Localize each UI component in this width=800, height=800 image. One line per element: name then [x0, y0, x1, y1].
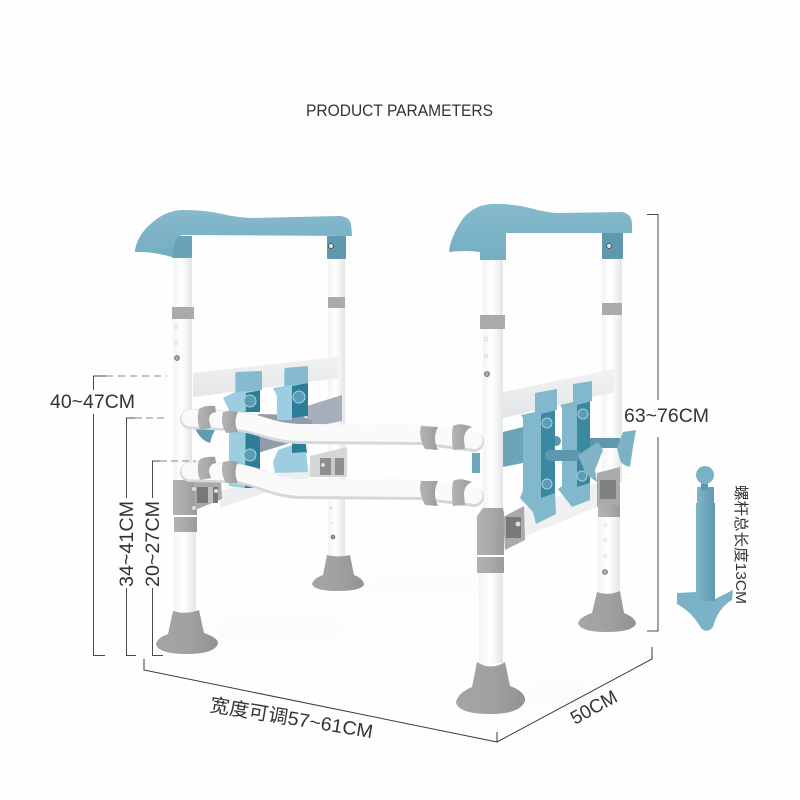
- right brackets and knobs: [503, 381, 636, 524]
- left bracket two: [273, 366, 308, 473]
- icon: adjustment screw: [677, 466, 733, 631]
- dimension: 34~41CM: [116, 418, 168, 656]
- right rear post: [578, 235, 636, 632]
- left brackets: [195, 366, 308, 488]
- dimension: 20~27CM: [142, 461, 196, 656]
- left lower cross bar: [220, 464, 312, 508]
- small blue tab: [472, 453, 480, 473]
- dimension: depth 50CM: 50CM: [567, 687, 621, 729]
- left bracket one: [223, 371, 262, 488]
- right bracket one: [520, 389, 557, 524]
- left front post: [156, 258, 218, 654]
- right front hinge block: [503, 506, 525, 550]
- title: PRODUCT PARAMETERS: [306, 102, 493, 120]
- right armrest: [449, 204, 632, 260]
- rear knob: [551, 430, 636, 467]
- dimension: height 63~76CM: [624, 214, 709, 631]
- dimension: width 57~61CM: [144, 647, 652, 743]
- product: toilet safety frame: [135, 204, 636, 714]
- dimension: width 57~61CM: 宽度可调57~61CM: [208, 694, 375, 743]
- rail clamps: [198, 406, 472, 506]
- dimension: height 63~76CM: 63~76CM: [624, 405, 709, 427]
- right lower cross bar: [523, 483, 597, 537]
- upper front rail: [190, 418, 474, 442]
- left side grey paddles: [258, 395, 342, 453]
- dimension: 20~27CM: 20~27CM: [142, 501, 164, 587]
- right rear bracket block: [597, 467, 620, 517]
- right back panel: [503, 369, 614, 418]
- right bracket two: [558, 381, 592, 507]
- floor shadows: [210, 580, 610, 701]
- dimension: 34~41CM: 34~41CM: [116, 501, 138, 587]
- lower front rail: [190, 471, 474, 497]
- mounting plate: [503, 427, 523, 467]
- left rear bracket block: [310, 447, 347, 477]
- left front hinge block: [192, 480, 222, 510]
- left back panel: [193, 357, 338, 397]
- dimension: 40~47CM: [50, 376, 167, 656]
- right front post: [456, 260, 525, 714]
- label: screw length: 螺杆总长度13CM: [732, 485, 749, 604]
- dimension: 40~47CM: 40~47CM: [50, 391, 135, 413]
- left armrest: [135, 210, 352, 258]
- front knob: [545, 442, 603, 482]
- left rear post: [312, 236, 364, 591]
